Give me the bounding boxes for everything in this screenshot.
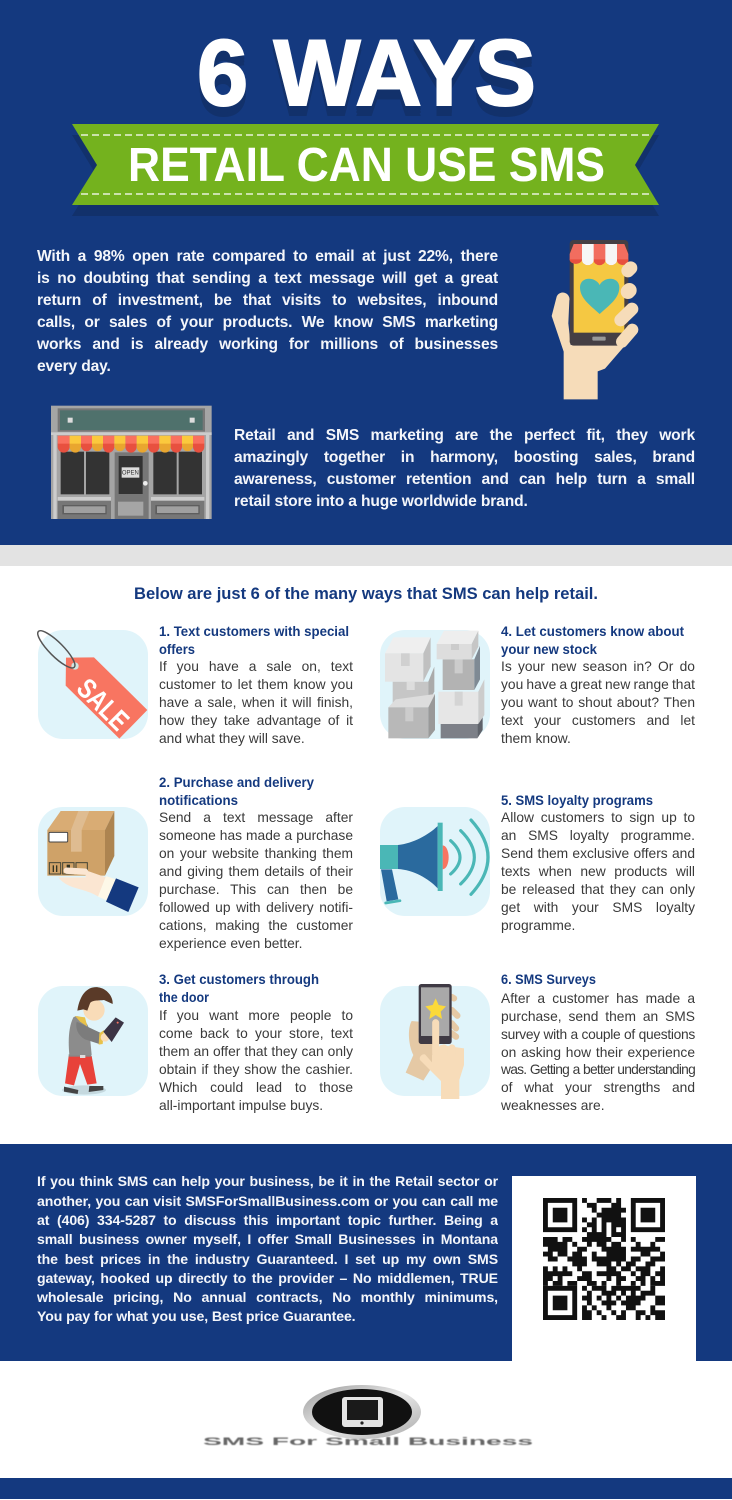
bottom bar <box>0 1478 732 1499</box>
body 6: was. Getting a better understanding <box>501 1062 695 1077</box>
body 5: an SMS loyalty programme. <box>501 828 695 843</box>
body 2: on your website thanking them <box>159 846 353 861</box>
footer contact text: at (406) 334-5287 to discuss this important topic further. Being a <box>37 1212 498 1228</box>
footer contact text <box>37 1172 498 1328</box>
title: 6 ways: 6 WAYS <box>197 20 536 125</box>
icon: storefront <box>51 406 212 519</box>
header background <box>0 0 732 545</box>
section heading: Below are just 6 of the many ways that SMS can help retail. <box>134 585 598 603</box>
panel: way 3 <box>38 972 353 1115</box>
retail paragraph <box>234 425 695 514</box>
panel: way 1 <box>33 624 353 748</box>
footer contact text: wholesale pricing, No annual contracts, No monthly minimums, <box>37 1289 498 1305</box>
title 4 <box>501 624 684 657</box>
body 2: purchase. This can then be <box>159 882 353 897</box>
footer panel background <box>0 1144 732 1361</box>
body 4: you want to shout about? Then <box>501 695 695 710</box>
grey divider band <box>0 545 732 566</box>
body 3: come back to your store, text <box>159 1026 353 1041</box>
title 2: notifications <box>159 793 238 808</box>
icon: stacked boxes <box>380 630 490 739</box>
intro paragraph <box>37 246 498 379</box>
body 1: and what they will save. <box>159 731 305 746</box>
icon: parcel in hand <box>38 807 148 916</box>
footer contact text: gateway, hooked up directly to the provider – No middlemen, TRUE <box>37 1270 498 1286</box>
QR code panel <box>512 1176 696 1361</box>
green ribbon banner <box>72 124 659 216</box>
body 3 <box>159 1007 353 1115</box>
footer contact text: If you think SMS can help your business, be it in the Retail sector or <box>37 1173 498 1189</box>
icon: sale tag <box>33 626 148 739</box>
title 5: 5. SMS loyalty programs <box>501 793 653 808</box>
title 2 <box>159 775 314 808</box>
logo: SMS For Small Business: SMS For Small Business <box>203 1436 533 1448</box>
title 1: 1. Text customers with special <box>159 624 349 639</box>
body 5: Send them exclusive offers and <box>501 846 695 861</box>
body 6: survey with a couple of questions <box>501 1027 695 1042</box>
body 1: have a sale, when it will finish, <box>159 695 353 710</box>
title 1 <box>159 624 349 657</box>
body 1 <box>159 658 353 748</box>
title 3: the door <box>159 990 210 1005</box>
body 5: get with your SMS loyalty <box>501 900 695 915</box>
body 5: be released that they can only <box>501 882 695 897</box>
body 5: programme. <box>501 918 575 933</box>
retail paragraph: Retail and SMS marketing are the perfect fit, they work <box>234 427 695 444</box>
body 2: experience even better. <box>159 936 302 951</box>
body 4 <box>501 658 695 748</box>
icon: person with phone <box>38 986 148 1096</box>
body 6: After a customer has made a <box>501 991 695 1006</box>
body 3: them an offer that they can only <box>159 1044 353 1059</box>
body 1: how they take advantage of it <box>159 713 353 728</box>
panel: way 5 <box>380 793 695 935</box>
icon: sale tag: SALE <box>71 672 135 737</box>
intro paragraph: return of investment, be that visits to websites, inbound <box>37 292 498 309</box>
body 2: and giving them details of their <box>159 864 353 879</box>
footer contact text: the best prices in the industry Guaranteed. I set up my own SMS <box>37 1251 498 1267</box>
body 6: on asking how their experience <box>501 1045 695 1060</box>
body 2: followed up with delivery notifi- <box>159 900 353 915</box>
intro paragraph: With a 98% open rate compared to email at just 22%, there <box>37 248 498 265</box>
title 6: 6. SMS Surveys <box>501 972 596 987</box>
body 2: someone has made a purchase <box>159 828 353 843</box>
panel: way 6 <box>380 972 695 1116</box>
panel: way 4 <box>380 624 695 748</box>
body 6 <box>501 990 695 1116</box>
intro paragraph: every day. <box>37 358 111 375</box>
body 4: you have a great new range that <box>501 677 695 692</box>
body 5: texts when new products will <box>501 864 695 879</box>
body 5: Allow customers to sign up to <box>501 810 695 825</box>
body 1: If you have a sale on, text <box>159 659 353 674</box>
body 3: all-important impulse buys. <box>159 1098 323 1113</box>
icon: hand holding phone <box>552 240 638 399</box>
title 4: your new stock <box>501 642 597 657</box>
footer contact text: small business owner myself, I offer Small Businesses in Montana <box>37 1231 498 1247</box>
title 2: 2. Purchase and delivery <box>159 775 314 790</box>
intro paragraph: works and is already working for millions of businesses <box>37 336 498 353</box>
body 1: customer to let them know you <box>159 677 353 692</box>
retail paragraph: retail store into a huge worldwide brand. <box>234 493 528 510</box>
intro paragraph: calls, or sales of your products. We know SMS marketing <box>37 314 498 331</box>
body 4: them know. <box>501 731 571 746</box>
footer contact text: You pay for what you use, Best price Guarantee. <box>37 1308 356 1324</box>
body 5 <box>501 809 695 935</box>
title 1: offers <box>159 642 195 657</box>
body 4: Is your new season in? Or do <box>501 659 695 674</box>
body 2: Send a text message after <box>159 810 353 825</box>
body 6: weaknesses are. <box>501 1098 605 1113</box>
logo: SMS For Small Business <box>203 1385 533 1448</box>
retail paragraph: amazingly together in harmony, boosting sales, brand <box>234 449 695 466</box>
panel: way 2 <box>38 775 353 953</box>
retail paragraph: awareness, customer retention and can help turn a small <box>234 471 695 488</box>
title 3: 3. Get customers through <box>159 972 319 987</box>
body 6: purchase, send them an SMS <box>501 1009 695 1024</box>
body 6: of what your strengths and <box>501 1080 695 1095</box>
icon: storefront: OPEN <box>122 471 139 477</box>
body 4: text your customers and let <box>501 713 695 728</box>
body 3: obtain if they show the cashier. <box>159 1062 353 1077</box>
body 3: Which could lead to those <box>159 1080 353 1095</box>
body 2 <box>159 809 353 953</box>
body 2: cations, making the customer <box>159 918 353 933</box>
icon: hand tapping phone star <box>380 984 490 1099</box>
title 4: 4. Let customers know about <box>501 624 684 639</box>
footer contact text: another, you can visit SMSForSmallBusiness.com or you can call me <box>37 1193 498 1209</box>
title 3 <box>159 972 319 1005</box>
green ribbon banner: RETAIL CAN USE SMS <box>128 139 605 192</box>
body 3: If you want more people to <box>159 1008 353 1023</box>
intro paragraph: is no doubting that sending a text message will get a great <box>37 270 498 287</box>
icon: megaphone <box>380 807 490 916</box>
